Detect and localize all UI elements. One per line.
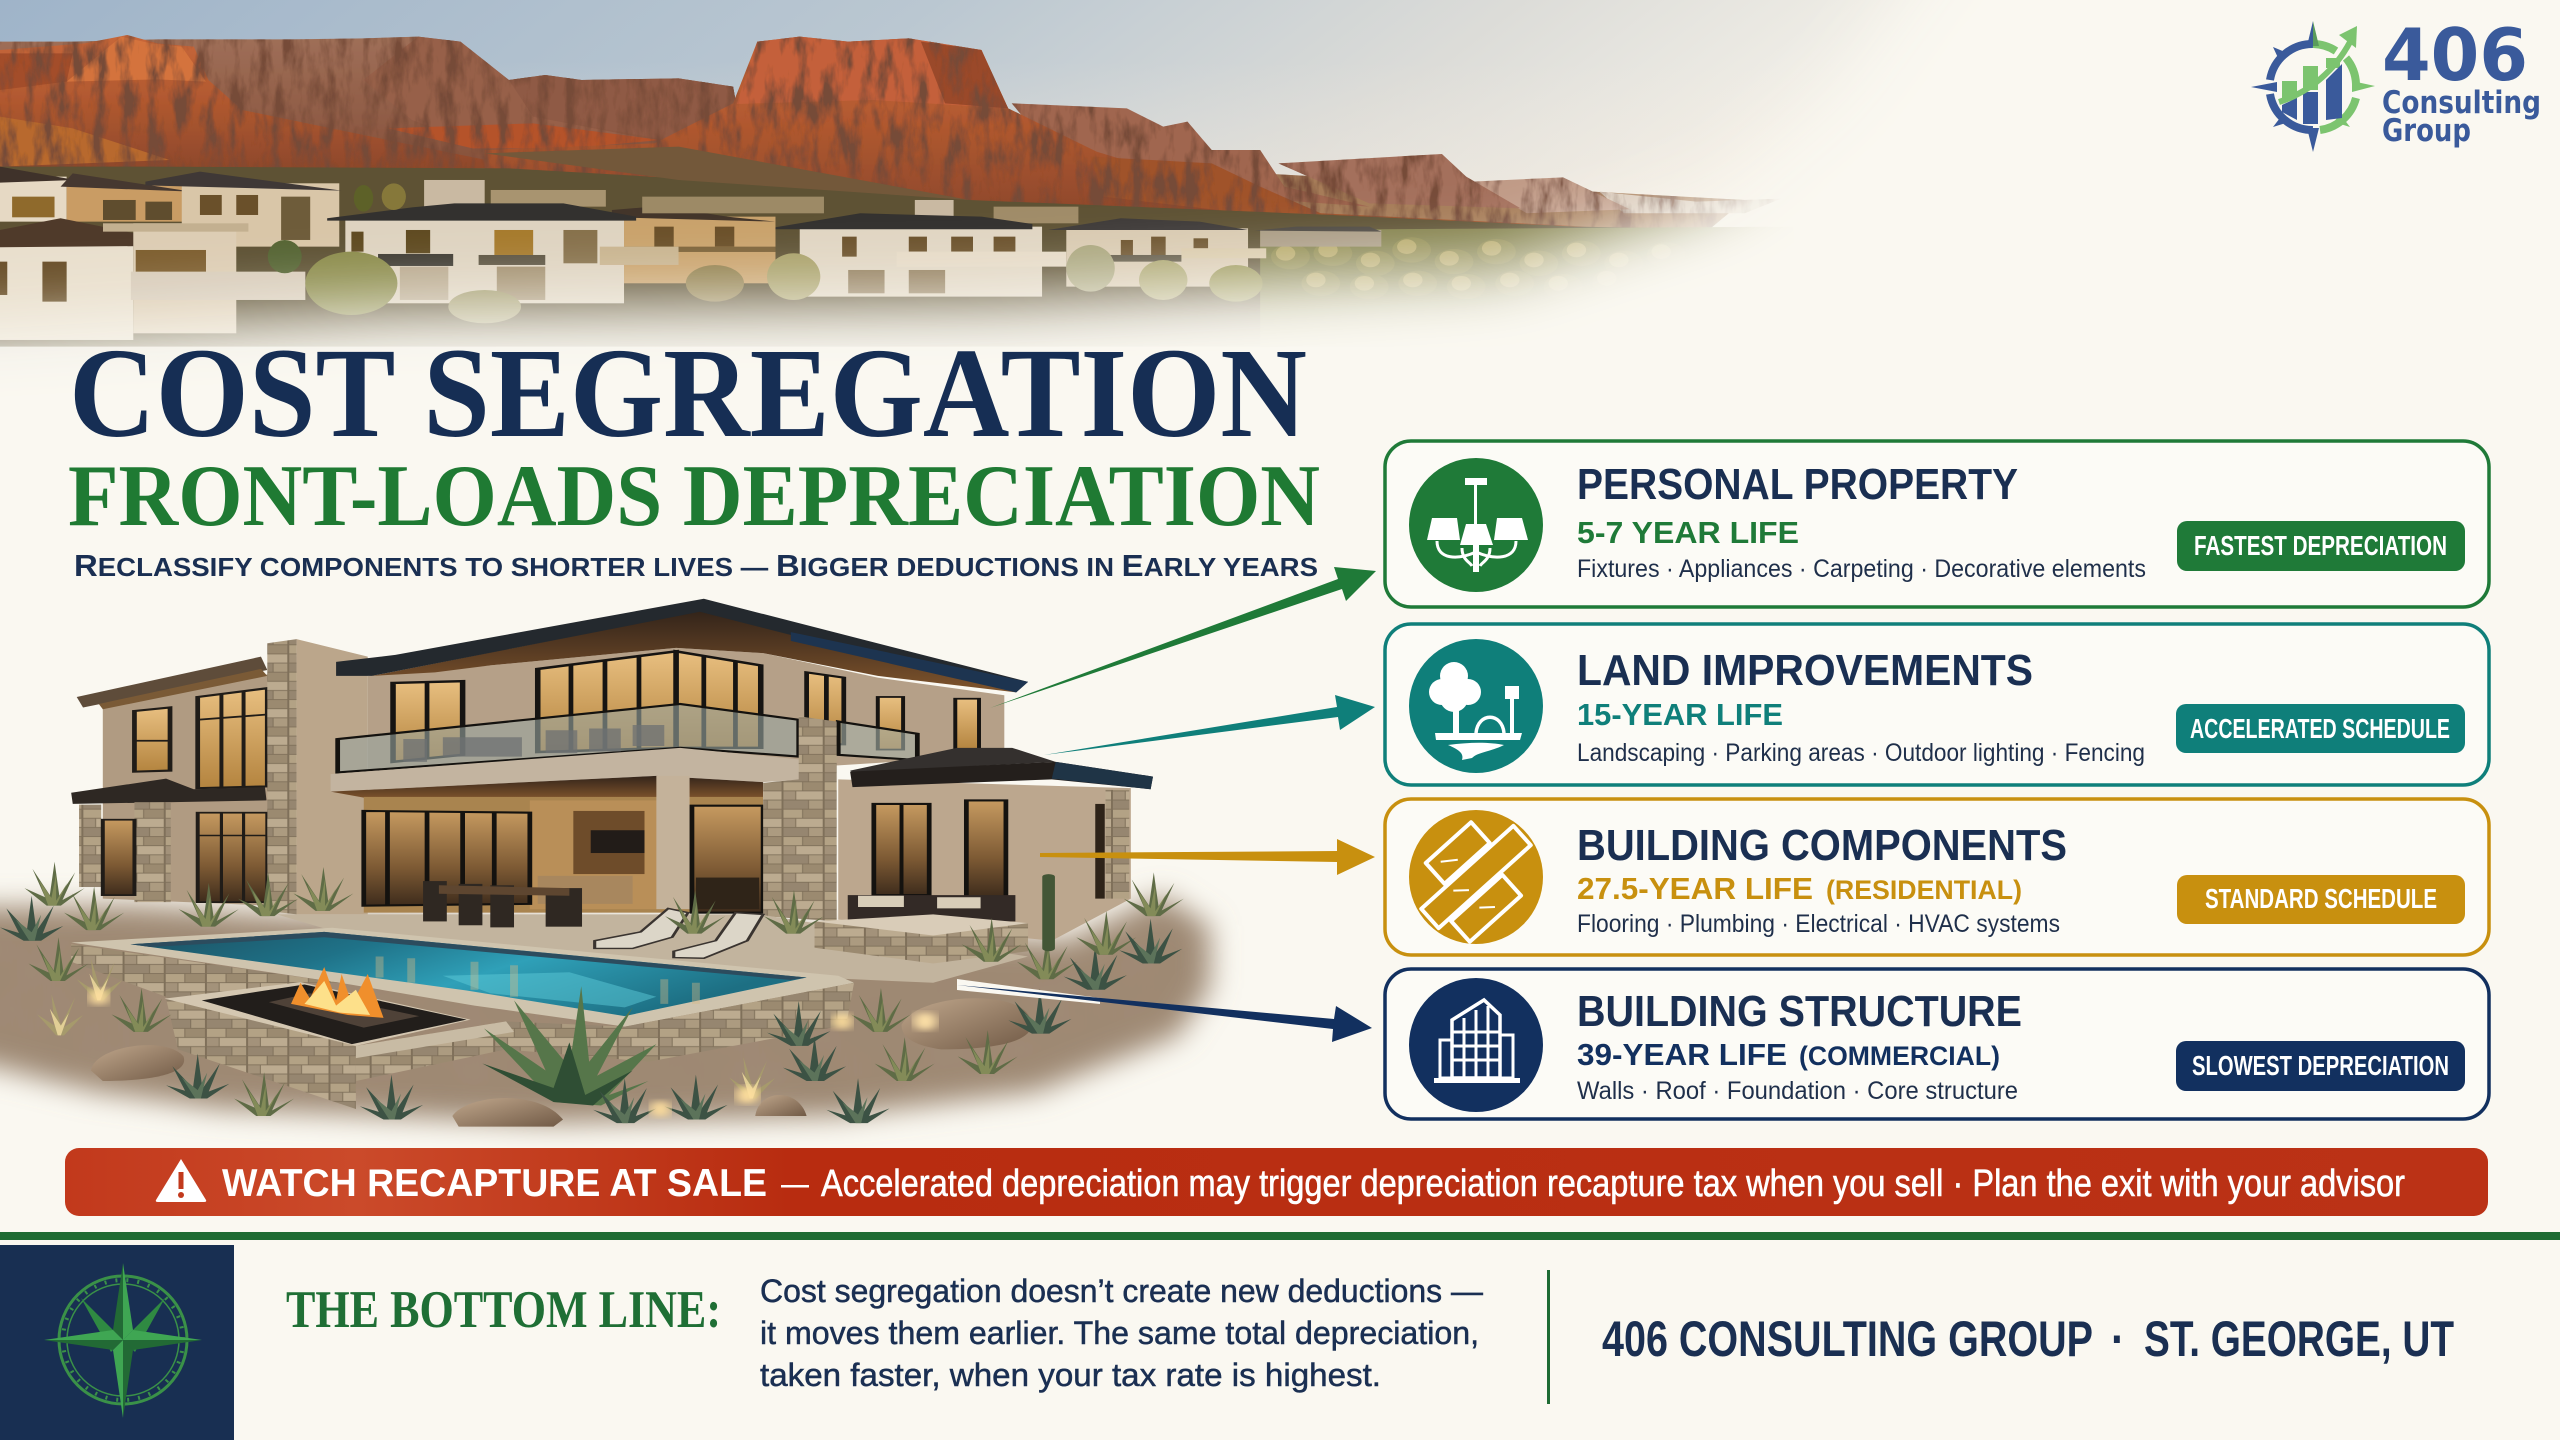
bottom line text block — [760, 1273, 1483, 1393]
fire pit with flames — [164, 967, 854, 1109]
arrow: house to personal property — [990, 567, 1376, 708]
logo wordmark: 406 — [2382, 13, 2528, 97]
warning banner — [65, 1148, 2488, 1216]
main upper storey — [336, 599, 1028, 772]
patio and dining — [277, 881, 1028, 983]
card heading: BUILDING STRUCTURE — [1577, 987, 2022, 1036]
subtitle: front-loads depreciation: FRONT-LOADS DEPRECIATION — [68, 448, 1320, 545]
card items: Landscaping · Parking areas · Outdoor lighting · Fencing — [1577, 739, 2145, 767]
card heading: PERSONAL PROPERTY — [1577, 460, 2018, 509]
footer: company and location: 406 CONSULTING GROUP — [1602, 1311, 2093, 1367]
right wing — [838, 748, 1153, 941]
arrow: house to building structure — [957, 979, 1372, 1042]
icon: office building — [1409, 978, 1543, 1112]
footer: company and location: ST. GEORGE, UT — [2144, 1311, 2454, 1367]
swimming pool — [71, 928, 854, 1027]
card life: 15-YEAR LIFE — [1577, 697, 1783, 732]
card items: Flooring · Plumbing · Electrical · HVAC systems — [1577, 910, 2060, 938]
planting, boulders and agave — [0, 862, 1184, 1127]
bottom line text block: Cost segregation doesn’t create new deductions — — [760, 1273, 1483, 1309]
card life: 39-YEAR LIFE — [1577, 1037, 1787, 1072]
banner text — [222, 1162, 2405, 1205]
card life: (RESIDENTIAL) — [1826, 875, 2022, 905]
panel: building structure — [1385, 969, 2489, 1119]
card life: 5-7 YEAR LIFE — [1577, 515, 1799, 550]
left wing — [71, 657, 269, 906]
icon: warning triangle — [156, 1159, 206, 1202]
card life: 27.5-YEAR LIFE — [1577, 871, 1813, 906]
badge: slowest depreciation — [2176, 1041, 2465, 1091]
badge: standard schedule — [2177, 875, 2465, 924]
badge: standard schedule: STANDARD SCHEDULE — [2205, 883, 2437, 914]
card heading: BUILDING COMPONENTS — [1577, 821, 2067, 870]
badge: accelerated schedule — [2176, 704, 2465, 753]
panel: navy compass block — [0, 1245, 234, 1440]
badge: slowest depreciation: SLOWEST DEPRECIATION — [2192, 1050, 2449, 1081]
ground floor — [331, 716, 837, 921]
card life — [1577, 871, 2022, 906]
badge: fastest depreciation — [2177, 521, 2465, 571]
arrow: house to land improvements — [1044, 695, 1375, 755]
logo compass mark — [2251, 21, 2375, 152]
icon: tree and lamp — [1409, 639, 1543, 773]
icon: chandelier — [1409, 458, 1543, 592]
banner text: — — [781, 1163, 809, 1205]
stone chimney column — [267, 639, 368, 914]
glass balcony — [331, 704, 917, 792]
logo wordmark — [2382, 13, 2541, 149]
title: cost segregation: COST SEGREGATION — [69, 322, 1307, 464]
bottom line text block: taken faster, when your tax rate is highest. — [760, 1357, 1381, 1393]
footer: company and location: · — [2111, 1311, 2125, 1367]
tagline: RECLASSIFY COMPONENTS TO SHORTER LIVES — BIGGER DEDUCTIONS IN EARLY YEARS — [74, 548, 1318, 583]
badge: accelerated schedule: ACCELERATED SCHEDULE — [2190, 713, 2450, 744]
panel: building components — [1385, 799, 2489, 955]
card items: Fixtures · Appliances · Carpeting · Decorative elements — [1577, 555, 2146, 583]
icon: compass rose — [44, 1263, 202, 1418]
badge: fastest depreciation: FASTEST DEPRECIATION — [2194, 530, 2447, 561]
landscape ground — [0, 895, 1210, 1123]
heading: the bottom line: THE BOTTOM LINE: — [286, 1281, 721, 1339]
photo: red rock mesas and hillside homes — [0, 0, 1882, 347]
card items: Walls · Roof · Foundation · Core structure — [1577, 1077, 2018, 1105]
card life — [1577, 1037, 2000, 1072]
footer divider — [1547, 1270, 1550, 1404]
green divider rule — [0, 1232, 2560, 1240]
panel: personal property — [1385, 441, 2489, 607]
logo: 406 consulting group — [2251, 13, 2541, 152]
card life: (COMMERCIAL) — [1799, 1041, 2000, 1071]
bottom line text block: it moves them earlier. The same total depreciation, — [760, 1315, 1479, 1351]
arrow: house to building components — [1040, 839, 1375, 875]
icon: floor planks — [1400, 803, 1552, 951]
panel: land improvements — [1385, 624, 2489, 785]
logo wordmark: Group — [2382, 113, 2471, 149]
card heading: LAND IMPROVEMENTS — [1577, 646, 2033, 695]
banner text: WATCH RECAPTURE AT SALE — [222, 1162, 767, 1205]
photo: luxury home with pool and fire pit — [0, 599, 1210, 1127]
